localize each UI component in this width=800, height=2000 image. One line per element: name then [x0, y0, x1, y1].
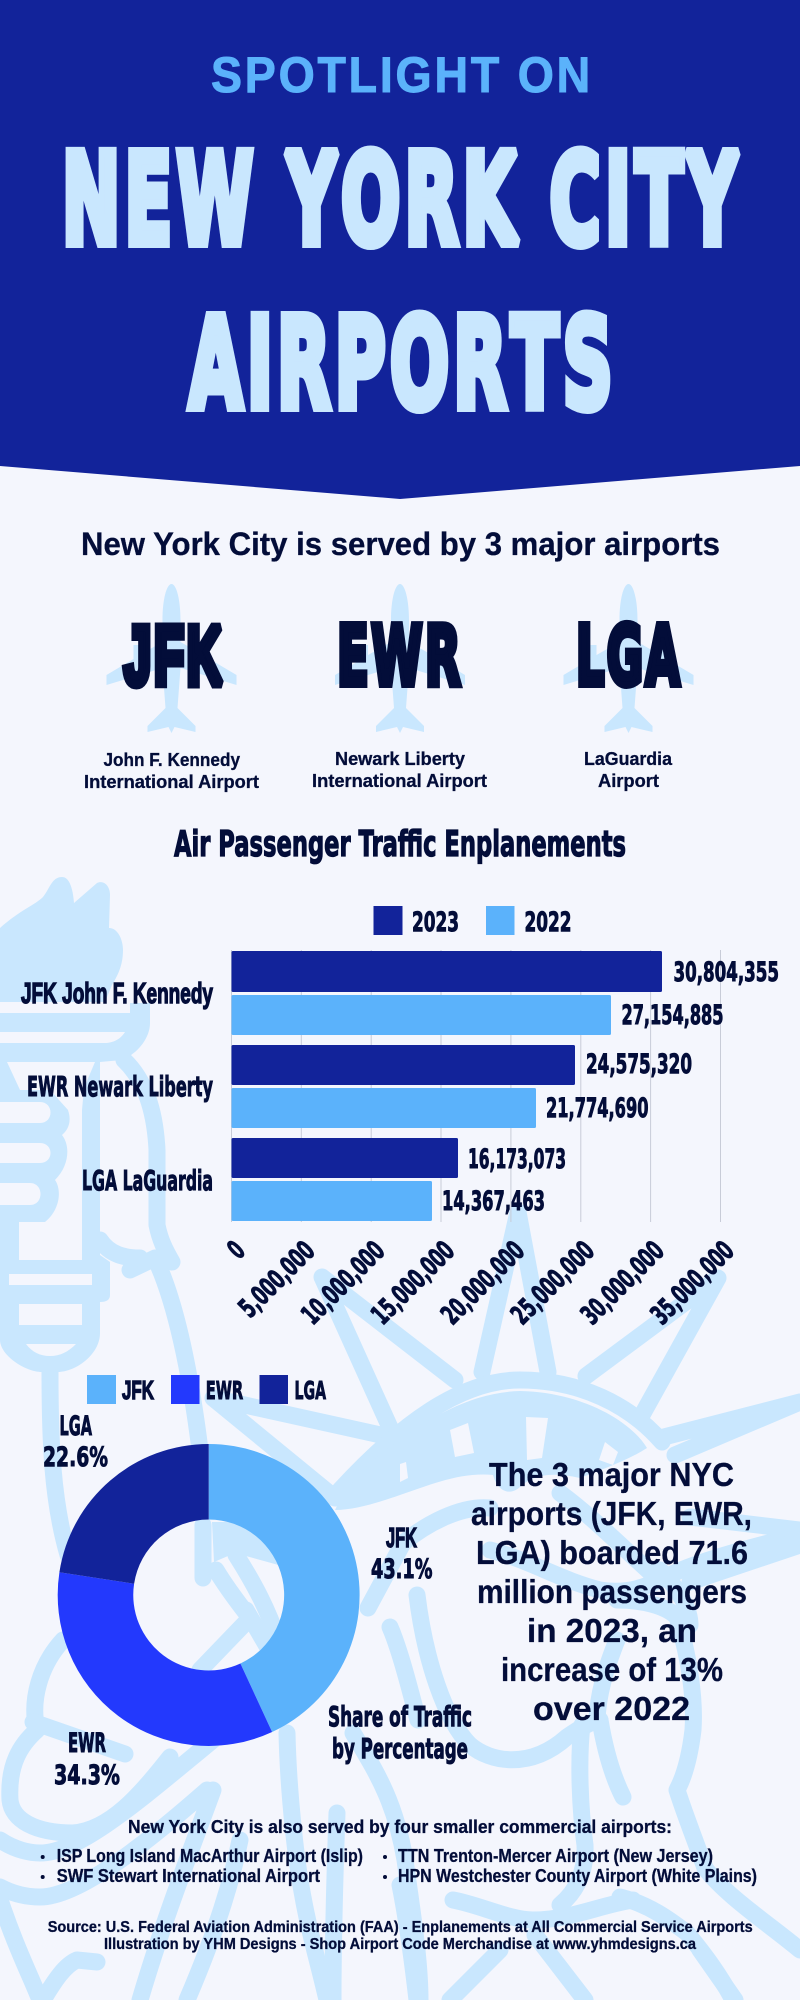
donut label: LGA: 22.6%: [43, 1442, 108, 1473]
segment: EWR 34.3%: [58, 1572, 272, 1746]
source note: [48, 1919, 753, 1953]
donut legend: [87, 1375, 326, 1405]
smaller airports list: [41, 1817, 757, 1886]
donut legend: EWR: [206, 1376, 243, 1405]
bar chart: enplanements: [21, 906, 779, 1331]
airport: LGA: [564, 584, 694, 791]
donut label: JFK: 43.1%: [371, 1554, 432, 1585]
value labels: 27,154,885: [622, 1000, 724, 1031]
torch and hand: [0, 1003, 150, 1372]
callout: 71.6 million passengers: over 2022: [533, 1690, 690, 1727]
list items: TTN Trenton-Mercer Airport (New Jersey): [398, 1846, 713, 1866]
value labels: 14,367,463: [442, 1186, 545, 1217]
callout: 71.6 million passengers: increase of 13%: [501, 1651, 723, 1688]
segment: JFK 43.1%: [209, 1444, 360, 1732]
list items: SWF Stewart International Airport: [57, 1866, 320, 1886]
donut chart: share of traffic: [43, 1375, 472, 1791]
value labels: [442, 957, 779, 1217]
axis labels: 10,000,000: [296, 1236, 391, 1331]
airport name: International Airport: [84, 772, 259, 792]
axis labels: 15,000,000: [365, 1236, 461, 1331]
airport name: Newark Liberty: [335, 749, 465, 769]
airport: JFK: [84, 584, 259, 792]
donut label: JFK: [371, 1522, 432, 1585]
airport name: [312, 749, 487, 791]
icon: plane: [335, 584, 465, 733]
donut label: LGA: LGA: [60, 1411, 92, 1442]
value labels: 16,173,073: [468, 1144, 566, 1175]
axis labels: 35,000,000: [645, 1236, 740, 1331]
donut legend: LGA: [294, 1376, 326, 1405]
airport name: [84, 750, 259, 792]
gridlines: [232, 950, 720, 1222]
donut label: EWR: EWR: [68, 1728, 106, 1759]
value labels: 24,575,320: [586, 1049, 692, 1080]
source note: Illustration by YHM Designs - Shop Airport Code Merchandise at www.yhmdesigns.ca: [104, 1936, 696, 1953]
arm and robe lines: [0, 1060, 800, 2000]
value labels: 21,774,690: [546, 1093, 648, 1124]
callout: 71.6 million passengers: million passengers: [477, 1573, 747, 1610]
list items: ISP Long Island MacArthur Airport (Islip): [57, 1846, 363, 1866]
donut label: JFK: JFK: [386, 1522, 417, 1553]
illustration: Statue of Liberty background: [0, 877, 800, 2000]
crown windows: [400, 1417, 618, 1482]
axis labels: 5,000,000: [233, 1236, 321, 1324]
chart legend: 2023: [412, 907, 459, 938]
airport name: International Airport: [312, 771, 487, 791]
airport code: LGA: [576, 610, 682, 704]
chart legend: 2022: [524, 907, 572, 938]
callout: 71.6 million passengers: airports (JFK, EWR,: [471, 1495, 752, 1532]
airport code: EWR: [337, 610, 463, 704]
crown: [335, 1391, 647, 1510]
list heading: New York City is also served by four smaller commercial airports:: [128, 1817, 672, 1837]
airport code: JFK: [124, 609, 225, 702]
axis labels: 20,000,000: [435, 1236, 531, 1331]
main title: [62, 128, 742, 437]
callout: 71.6 million passengers: LGA) boarded 71.6: [476, 1534, 748, 1571]
icon: plane: [564, 584, 694, 733]
category labels: JFK John F. Kennedy: [21, 978, 213, 1010]
axis labels: 0: [222, 1236, 251, 1265]
donut label: EWR: 34.3%: [54, 1760, 120, 1791]
donut title: Share of Traffic: [328, 1700, 472, 1733]
axis labels: 25,000,000: [505, 1236, 601, 1331]
airport name: John F. Kennedy: [104, 750, 240, 770]
axis labels: 30,000,000: [575, 1236, 671, 1331]
wash inside donut hole: [212, 1522, 282, 1566]
airport name: [584, 749, 673, 791]
donut label: EWR: [54, 1728, 120, 1791]
airport: EWR: [312, 584, 487, 791]
donut label: LGA: [43, 1411, 108, 1473]
axis labels: [222, 1236, 740, 1331]
donut legend: JFK: [122, 1375, 154, 1405]
category labels: [21, 978, 213, 1197]
torch flame: [0, 877, 123, 1002]
airport name: Airport: [598, 771, 659, 791]
segment: LGA 22.6%: [59, 1444, 209, 1584]
callout: 71.6 million passengers: The 3 major NYC: [489, 1456, 734, 1493]
chart legend: [374, 906, 572, 938]
bars: [232, 951, 662, 1221]
category labels: EWR Newark Liberty: [27, 1070, 213, 1103]
header banner: [0, 0, 800, 499]
heading: 3 major airports: New York City is served by 3 major airports: [81, 526, 720, 562]
bullet dots: [41, 1855, 387, 1879]
donut title: by Percentage: [332, 1732, 468, 1765]
airport name: LaGuardia: [584, 749, 673, 769]
eyebrow heading: SPOTLIGHT ON: [211, 47, 593, 103]
crown rays: [213, 1212, 800, 1582]
callout: 71.6 million passengers: [471, 1456, 752, 1727]
category labels: LGA LaGuardia: [82, 1164, 213, 1197]
callout: 71.6 million passengers: in 2023, an: [527, 1612, 697, 1649]
list items: [57, 1846, 757, 1886]
list items: HPN Westchester County Airport (White Plains): [398, 1866, 757, 1886]
donut title: [328, 1700, 472, 1765]
icon: plane: [106, 584, 236, 733]
